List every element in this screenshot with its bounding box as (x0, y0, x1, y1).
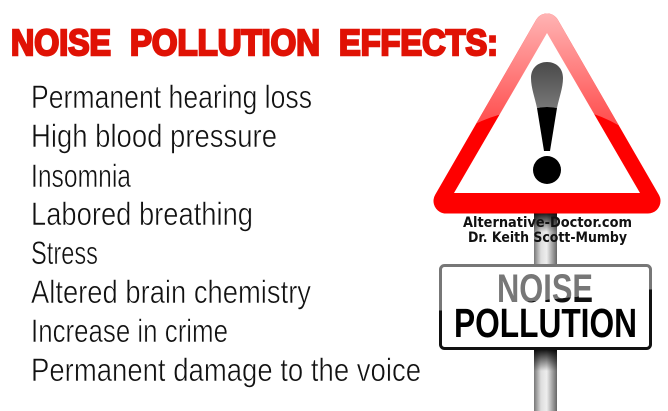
attribution: Alternative-Doctor.com (463, 215, 632, 231)
triangle red border (446, 26, 648, 201)
sign panel (440, 266, 650, 348)
effect 2: High blood pressure (31, 118, 277, 154)
title (11, 22, 498, 63)
title: POLLUTION (130, 22, 320, 63)
title: EFFECTS: (339, 22, 498, 63)
effect 8: Permanent damage to the voice (31, 352, 421, 388)
effect 7: Increase in crime (31, 313, 228, 349)
effect 3: Insomnia (31, 158, 131, 194)
effect 5: Stress (31, 235, 98, 271)
effect 4: Labored breathing (31, 196, 253, 232)
noise pollution sign (440, 266, 650, 348)
exclamation mark (531, 62, 563, 184)
sign pole (534, 210, 557, 411)
triangle gloss highlight (476, 14, 619, 126)
attribution (463, 215, 632, 246)
sign text: noise: NOISE (497, 267, 593, 311)
triangle white interior (454, 33, 640, 193)
title: NOISE (11, 22, 111, 63)
list of effects (31, 79, 421, 388)
effect 6: Altered brain chemistry (31, 274, 311, 310)
attribution: Dr. Keith Scott-Mumby (468, 230, 627, 246)
effect 1: Permanent hearing loss (31, 79, 312, 115)
icon: warning triangle (420, 0, 668, 201)
